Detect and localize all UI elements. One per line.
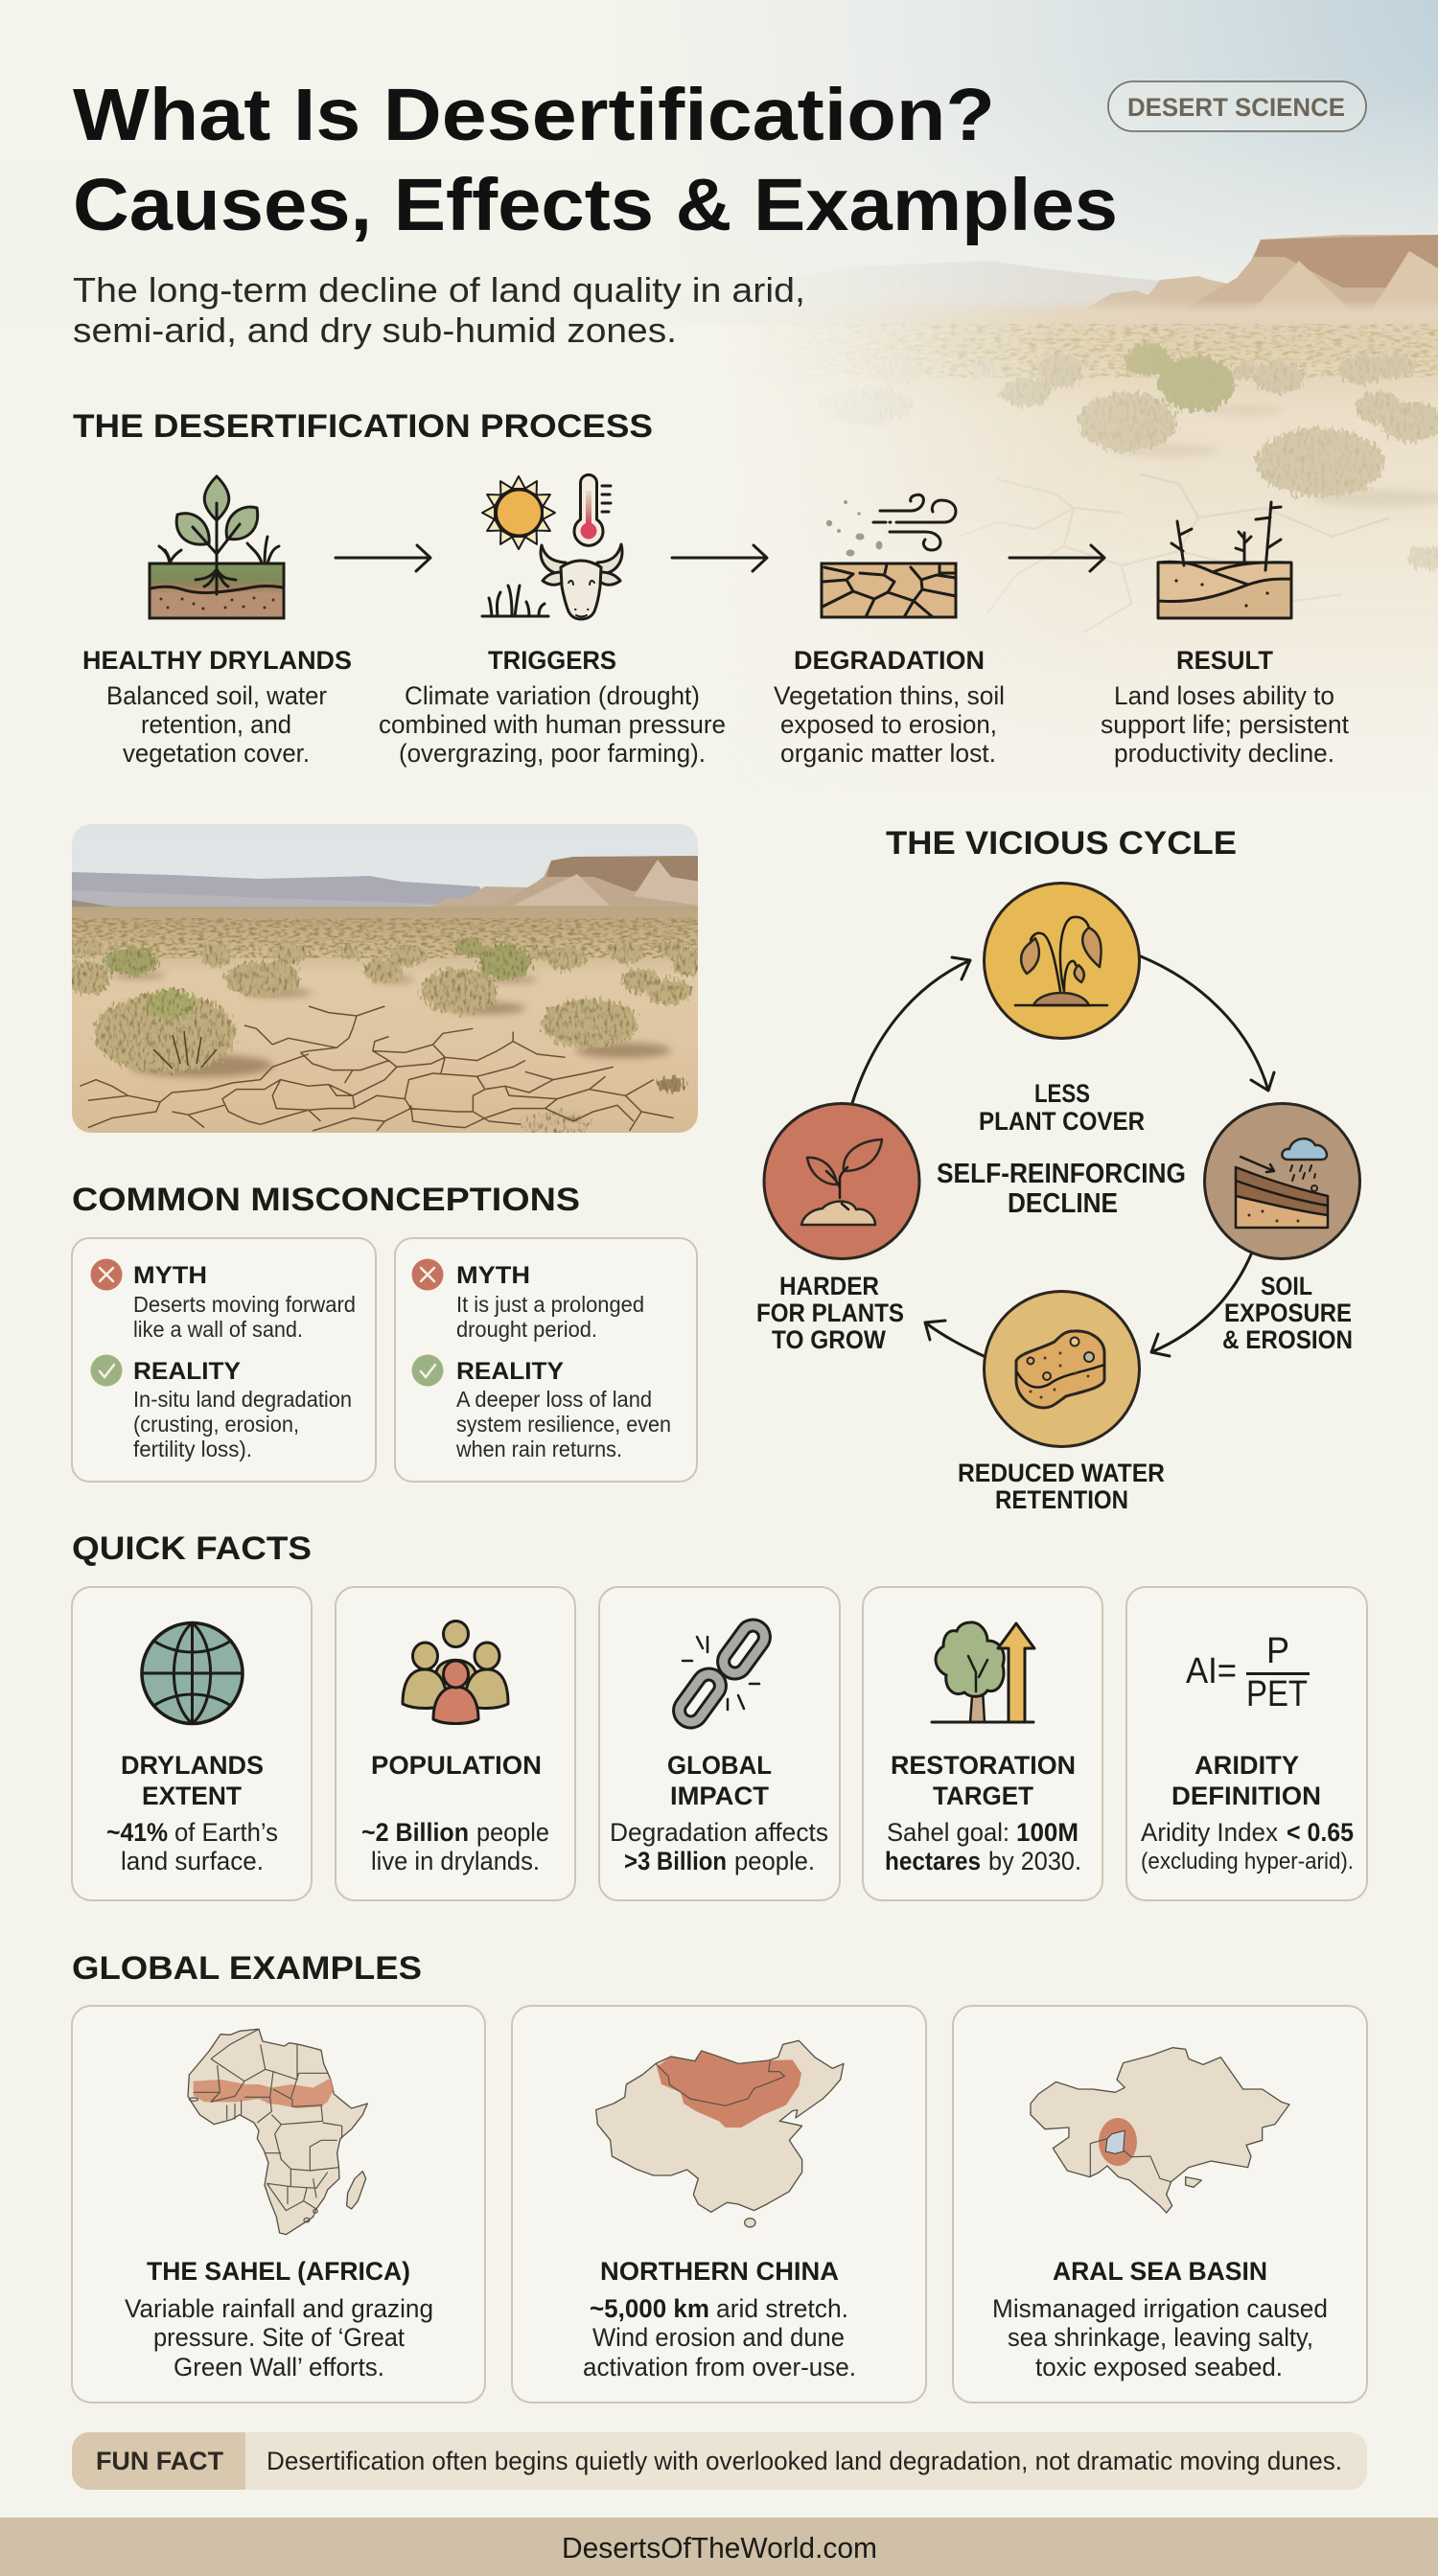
node: soil exposure: [1204, 1104, 1359, 1259]
label: soil exposure and erosion: [1222, 1272, 1353, 1354]
background desert scene: [771, 0, 1438, 700]
icon: tree and up arrow: [932, 1622, 1034, 1722]
panel: aridity definition: (excluding hyper-arid).: [1141, 1849, 1354, 1874]
step: result: productivity decline.: [1114, 739, 1334, 768]
panel: global impact: GLOBAL: [667, 1751, 772, 1780]
panel: drylands extent: ~41%: [106, 1818, 168, 1847]
panel: northern china: arid stretch.: [716, 2294, 848, 2323]
panel: global impact: IMPACT: [670, 1782, 770, 1810]
panel: restoration target: by 2030.: [988, 1847, 1081, 1875]
node: less plant cover: [984, 884, 1139, 1039]
arrow: water retention to harder to grow: [925, 1321, 984, 1356]
panel: restoration target: 100M: [1016, 1818, 1078, 1847]
panel: myth card 2: It is just a prolonged: [456, 1292, 644, 1317]
title: Causes, Effects & Examples: [73, 164, 1118, 246]
label: reduced water retention: [958, 1459, 1165, 1514]
arrow: harder to grow to plant cover: [852, 957, 970, 1103]
step: healthy drylands: HEALTHY DRYLANDS: [82, 646, 352, 675]
label: reduced water retention: RETENTION: [995, 1485, 1128, 1514]
panel: restoration target: hectares: [885, 1847, 981, 1875]
label: reduced water retention: REDUCED WATER: [958, 1459, 1165, 1487]
node: reduced water retention: [984, 1292, 1139, 1447]
heading: common misconceptions: COMMON MISCONCEPTIONS: [72, 1182, 580, 1218]
title: [73, 74, 1118, 246]
panel: population: people: [476, 1818, 549, 1847]
step: healthy drylands: retention, and: [141, 710, 291, 739]
arrow: step 2 to 3: [672, 545, 767, 571]
panel: global impact: Degradation affects: [610, 1818, 828, 1847]
heading: quick facts: QUICK FACTS: [72, 1530, 312, 1567]
panel: myth card 1: In-situ land degradation: [133, 1387, 352, 1412]
title: What Is Desertification?: [73, 74, 995, 156]
panel: aral sea basin: ARAL SEA BASIN: [1053, 2257, 1267, 2286]
step: triggers: combined with human pressure: [379, 710, 726, 739]
heading: global examples: GLOBAL EXAMPLES: [72, 1950, 422, 1987]
panel: myth card 1: MYTH: [133, 1262, 207, 1289]
panel: northern china: ~5,000 km: [590, 2294, 709, 2323]
step: healthy drylands: vegetation cover.: [123, 739, 310, 768]
callout: fun fact: [72, 2432, 1367, 2490]
label: harder for plants to grow: [756, 1272, 904, 1354]
panel: population: POPULATION: [371, 1751, 542, 1780]
panel: the sahel: pressure. Site of ‘Great: [153, 2323, 405, 2352]
step: degradation: exposed to erosion,: [780, 710, 997, 739]
panel: drylands extent: land surface.: [121, 1847, 264, 1875]
step: triggers: (overgrazing, poor farming).: [399, 739, 706, 768]
panel: myth card 1: fertility loss).: [133, 1437, 252, 1461]
formula: aridity index: AI=: [1186, 1651, 1237, 1691]
panel: aridity definition: Aridity Index: [1141, 1818, 1278, 1847]
step: triggers: TRIGGERS: [488, 646, 616, 675]
panel: northern china: [512, 2006, 926, 2403]
arrow: soil exposure to water retention: [1151, 1254, 1251, 1356]
panel: myth card 2: system resilience, even: [456, 1412, 671, 1437]
panel: drylands extent: EXTENT: [142, 1782, 242, 1810]
panel: drylands extent: [72, 1587, 312, 1900]
footer: [0, 2518, 1438, 2576]
panel: myth card 1: Deserts moving forward: [133, 1292, 356, 1317]
panel: myth card 2: REALITY: [456, 1358, 564, 1385]
step: result: support life; persistent: [1101, 710, 1349, 739]
panel: northern china: Wind erosion and dune: [592, 2323, 845, 2352]
panel: global impact: [599, 1587, 840, 1900]
label: harder for plants to grow: FOR PLANTS: [756, 1299, 904, 1327]
node: harder for plants to grow: [764, 1104, 919, 1259]
panel: myth card 1: [72, 1238, 376, 1482]
label: self-reinforcing decline: DECLINE: [1008, 1188, 1118, 1219]
icon: healthy drylands plant and soil: [150, 476, 284, 618]
panel: aral sea basin: toxic exposed seabed.: [1035, 2353, 1283, 2381]
icon: myth cross: [90, 1259, 123, 1290]
step: triggers: [379, 646, 726, 768]
panel: global impact: >3 Billion: [624, 1847, 727, 1875]
label: less plant cover: [979, 1079, 1145, 1136]
footer: DesertsOfTheWorld.com: [562, 2531, 877, 2564]
panel: aridity definition: ARIDITY: [1194, 1751, 1299, 1780]
formula: aridity index: [1186, 1631, 1310, 1714]
panel: northern china: activation from over-use.: [583, 2353, 856, 2381]
panel: myth card 2: [395, 1238, 697, 1482]
step: degradation: Vegetation thins, soil: [774, 681, 1005, 710]
panel: myth card 1: (crusting, erosion,: [133, 1412, 299, 1437]
arrow: step 1 to 2: [336, 545, 430, 571]
panel: population: [336, 1587, 575, 1900]
label: self-reinforcing decline: SELF-REINFORCING: [937, 1159, 1186, 1189]
map: china with northern drylands: [596, 2040, 844, 2227]
panel: aridity definition: [1126, 1587, 1367, 1900]
panel: northern china: NORTHERN CHINA: [600, 2257, 839, 2286]
step: result: Land loses ability to: [1114, 681, 1334, 710]
heading: the vicious cycle: THE VICIOUS CYCLE: [886, 825, 1237, 862]
step: result: [1101, 646, 1349, 768]
step: result: RESULT: [1176, 646, 1273, 675]
photo: cracked desert landscape: [65, 824, 701, 1137]
step: healthy drylands: [82, 646, 352, 768]
icon: triggers sun, thermometer, cow, grass: [482, 475, 622, 619]
label: soil exposure and erosion: EXPOSURE: [1224, 1299, 1352, 1327]
panel: population: ~2 Billion: [361, 1818, 469, 1847]
panel: the sahel: THE SAHEL (AFRICA): [147, 2257, 410, 2286]
formula: aridity index: PET: [1246, 1674, 1308, 1714]
panel: myth card 2: A deeper loss of land: [456, 1387, 652, 1412]
panel: aridity definition: DEFINITION: [1171, 1782, 1321, 1810]
panel: myth card 2: when rain returns.: [455, 1437, 622, 1461]
panel: aral sea basin: [953, 2006, 1367, 2403]
formula: aridity index: P: [1266, 1631, 1289, 1671]
panel: myth card 2: MYTH: [456, 1262, 530, 1289]
callout: fun fact: Desertification often begins quietly with overlooked land degradation, not dramatic moving dunes.: [267, 2447, 1342, 2475]
panel: myth card 1: like a wall of sand.: [133, 1317, 303, 1342]
panel: global impact: people.: [734, 1847, 815, 1875]
icon: reality check: [412, 1355, 443, 1386]
subtitle: [73, 270, 805, 350]
callout: fun fact: FUN FACT: [96, 2447, 224, 2475]
icon: result barren soil and dead sticks: [1158, 502, 1291, 618]
panel: restoration target: Sahel goal:: [887, 1818, 1009, 1847]
badge: desert science: DESERT SCIENCE: [1127, 93, 1345, 122]
icon: myth cross: [412, 1259, 443, 1290]
panel: the sahel: Green Wall’ efforts.: [174, 2353, 384, 2381]
panel: drylands extent: of Earth’s: [174, 1818, 278, 1847]
icon: breaking chain: [675, 1621, 769, 1727]
map: africa with sahel band: [188, 2029, 367, 2235]
subtitle: semi-arid, and dry sub-humid zones.: [73, 310, 677, 350]
heading: the desertification process: THE DESERTIFICATION PROCESS: [73, 408, 653, 445]
label: harder for plants to grow: HARDER: [779, 1272, 879, 1300]
label: soil exposure and erosion: SOIL: [1261, 1272, 1312, 1300]
icon: people group: [403, 1622, 508, 1723]
panel: restoration target: RESTORATION: [891, 1751, 1076, 1780]
icon: reality check: [90, 1355, 123, 1386]
arrow: step 3 to 4: [1009, 545, 1104, 571]
step: triggers: Climate variation (drought): [405, 681, 700, 710]
panel: the sahel: [72, 2006, 485, 2403]
arrow: plant cover to soil exposure: [1141, 956, 1274, 1091]
panel: aral sea basin: sea shrinkage, leaving salty,: [1008, 2323, 1313, 2352]
label: harder for plants to grow: TO GROW: [772, 1325, 886, 1354]
label: self-reinforcing decline: [937, 1159, 1186, 1219]
map: central asia with aral sea: [1031, 2048, 1289, 2213]
panel: restoration target: [863, 1587, 1102, 1900]
panel: myth card 1: REALITY: [133, 1358, 241, 1385]
panel: drylands extent: DRYLANDS: [121, 1751, 264, 1780]
icon: degradation cracked soil and wind: [822, 494, 956, 617]
panel: aral sea basin: Mismanaged irrigation caused: [992, 2294, 1328, 2323]
panel: restoration target: TARGET: [933, 1782, 1033, 1810]
step: degradation: DEGRADATION: [794, 646, 985, 675]
icon: globe: [142, 1623, 243, 1723]
panel: population: live in drylands.: [371, 1847, 540, 1875]
panel: the sahel: Variable rainfall and grazing: [125, 2294, 433, 2323]
subtitle: The long-term decline of land quality in arid,: [73, 270, 805, 310]
label: soil exposure and erosion: & EROSION: [1222, 1325, 1353, 1354]
label: less plant cover: LESS: [1034, 1079, 1090, 1108]
panel: myth card 2: drought period.: [456, 1317, 597, 1342]
cycle diagram: [756, 884, 1359, 1514]
step: healthy drylands: Balanced soil, water: [106, 681, 327, 710]
step: degradation: organic matter lost.: [780, 739, 996, 768]
label: less plant cover: PLANT COVER: [979, 1107, 1145, 1136]
badge: desert science: [1108, 81, 1366, 131]
panel: aridity definition: < 0.65: [1287, 1818, 1354, 1847]
step: degradation: [774, 646, 1005, 768]
